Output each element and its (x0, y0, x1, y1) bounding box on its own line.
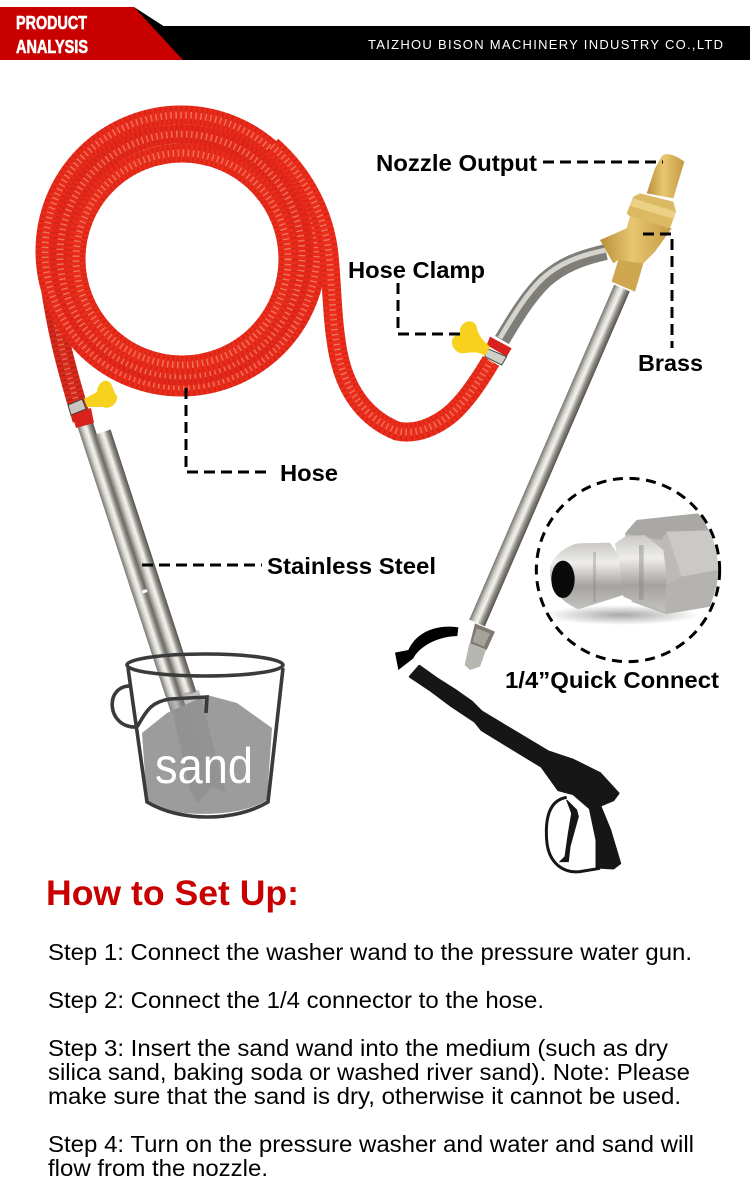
part labels: Nozzle Output (376, 150, 537, 176)
header banner (0, 7, 750, 60)
step 3: Step 3: Insert the sand wand into the medium (such as dry (48, 1035, 668, 1061)
trigger guard (546, 797, 600, 872)
setup steps (48, 939, 694, 1181)
icon: yellow wing screw (84, 381, 117, 408)
part labels: 1/4”Quick Connect (505, 667, 719, 693)
right hose run (272, 146, 491, 432)
trigger (560, 800, 578, 862)
step 4 (48, 1131, 694, 1181)
sand bucket (112, 654, 283, 817)
part labels: Hose Clamp (348, 257, 485, 283)
quick connect fitting (465, 623, 495, 670)
part labels (267, 150, 719, 693)
hex nut (625, 513, 722, 614)
contact shadow (548, 606, 692, 624)
part labels: Stainless Steel (267, 553, 436, 579)
neck (615, 535, 667, 612)
left hose clamp (68, 381, 117, 428)
nose (550, 543, 623, 609)
banner title: ANALYSIS (16, 37, 88, 57)
step 4: flow from the nozzle. (48, 1155, 268, 1181)
brass nozzle (600, 154, 684, 292)
sand fill (142, 695, 272, 814)
sand label: sand (155, 738, 253, 794)
step 2: Step 2: Connect the 1/4 connector to the hose. (48, 987, 544, 1013)
step 3: silica sand, baking soda or washed river sand). Note: Please (48, 1059, 690, 1085)
banner title: PRODUCT (16, 13, 87, 33)
part labels: Hose (280, 460, 338, 486)
step 1: Step 1: Connect the washer wand to the pressure water gun. (48, 939, 692, 965)
step 3: make sure that the sand is dry, otherwise it cannot be used. (48, 1083, 681, 1109)
icon: curved arrow (395, 627, 458, 670)
callout lines (142, 162, 672, 565)
left stainless steel wand (77, 422, 196, 715)
bucket outline (112, 654, 283, 817)
bore (551, 561, 575, 598)
company name: TAIZHOU BISON MACHINERY INDUSTRY CO.,LTD (368, 37, 723, 52)
banner title (16, 13, 88, 57)
bent inlet tube (500, 250, 606, 340)
right hose clamp (452, 321, 512, 365)
right wand tube (465, 250, 630, 670)
red hose coil (45, 115, 491, 432)
icon: yellow wing screw (452, 321, 490, 356)
step 4: Step 4: Turn on the pressure washer and water and sand will (48, 1131, 694, 1157)
section heading: How to Set Up: (46, 874, 299, 913)
quick connect inset (536, 478, 722, 662)
step 3 (48, 1035, 690, 1109)
part labels: Brass (638, 350, 703, 376)
coil strands (45, 115, 317, 387)
pressure washer gun (410, 666, 620, 872)
left hose tail (50, 285, 82, 420)
submerged wand (170, 690, 226, 803)
